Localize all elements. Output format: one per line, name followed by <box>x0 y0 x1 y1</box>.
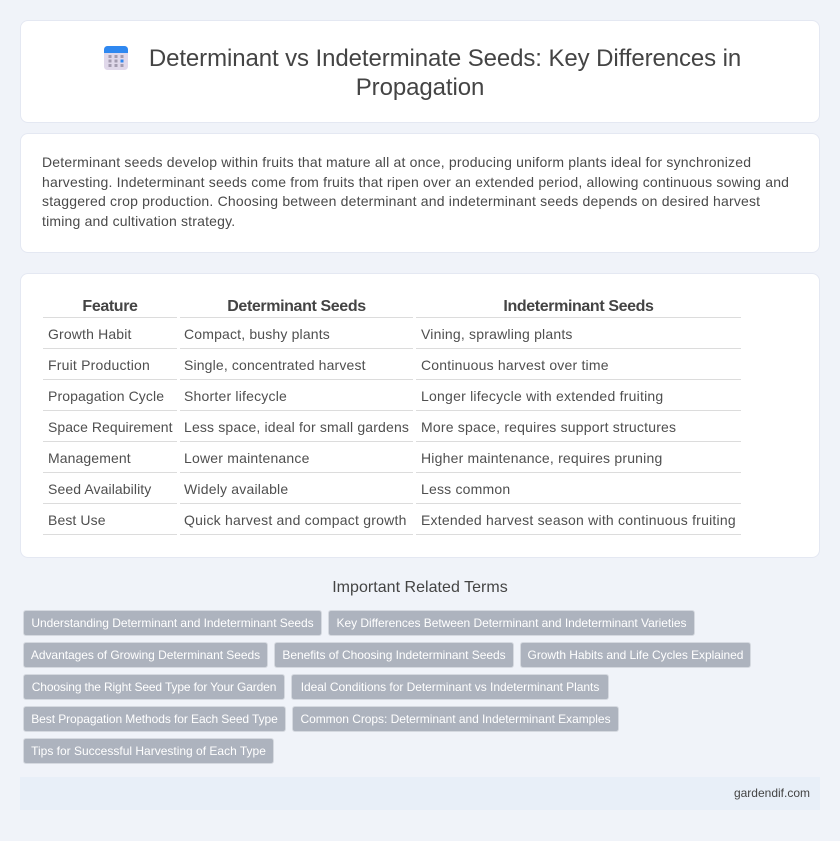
tag <box>291 674 609 700</box>
table: determinant vs indeterminant: Best Use <box>48 512 106 528</box>
table: determinant vs indeterminant: Longer lifecycle with extended fruiting <box>421 388 663 404</box>
tag: Key Differences Between Determinant and Indeterminant Varieties <box>337 616 686 630</box>
heading: related terms: Important Related Terms <box>332 579 508 596</box>
tag: Growth Habits and Life Cycles Explained <box>528 648 743 662</box>
panel: header <box>20 20 820 123</box>
table: determinant vs indeterminant: Continuous harvest over time <box>421 357 609 373</box>
table: determinant vs indeterminant: More space, requires support structures <box>421 419 676 435</box>
table: determinant vs indeterminant: Higher maintenance, requires pruning <box>421 450 662 466</box>
tag <box>520 642 751 668</box>
table: determinant vs indeterminant: Management <box>48 450 131 466</box>
text block: introduction <box>42 154 789 229</box>
panel: introduction <box>20 133 820 253</box>
text block: introduction: harvesting. Indeterminant seeds come from fruits that ripen over an extended period, allowing continuous sowing and <box>42 174 789 190</box>
tag <box>23 738 274 764</box>
tag <box>23 674 285 700</box>
table: determinant vs indeterminant: Shorter lifecycle <box>184 388 287 404</box>
tag: Benefits of Choosing Indeterminant Seeds <box>282 648 506 662</box>
text block: introduction: Determinant seeds develop within fruits that mature all at once, producing uniform plants ideal for synchronized <box>42 154 751 170</box>
tag: Common Crops: Determinant and Indeterminant Examples <box>300 712 611 726</box>
table: determinant vs indeterminant: Seed Availability <box>48 481 151 497</box>
tag <box>274 642 514 668</box>
tag <box>23 610 322 636</box>
tags: related terms <box>23 610 751 764</box>
tag: Choosing the Right Seed Type for Your Garden <box>32 680 276 694</box>
icon: calendar <box>104 46 128 70</box>
table: determinant vs indeterminant: Widely available <box>184 481 288 497</box>
table: determinant vs indeterminant: Vining, sprawling plants <box>421 326 573 342</box>
tag <box>292 706 619 732</box>
title: Propagation <box>356 74 484 101</box>
title: Determinant vs Indeterminate Seeds: Key Differences in <box>149 45 741 72</box>
table: determinant vs indeterminant: Single, concentrated harvest <box>184 357 366 373</box>
tag: Best Propagation Methods for Each Seed Type <box>31 712 278 726</box>
tag: Understanding Determinant and Indeterminant Seeds <box>31 616 314 630</box>
title <box>149 45 741 101</box>
footer: site name: gardendif.com <box>734 786 810 800</box>
table: determinant vs indeterminant: Lower maintenance <box>184 450 310 466</box>
table: determinant vs indeterminant: Fruit Production <box>48 357 150 373</box>
text block: introduction: staggered crop production. Choosing between determinant and indeterminant seeds depends on desired harvest <box>42 193 760 209</box>
table: determinant vs indeterminant: Less common <box>421 481 510 497</box>
text block: introduction: timing and cultivation strategy. <box>42 213 235 229</box>
table: determinant vs indeterminant: Determinant Seeds <box>227 298 366 315</box>
tag: Ideal Conditions for Determinant vs Indeterminant Plants <box>301 680 599 694</box>
tag: Tips for Successful Harvesting of Each Type <box>31 744 266 758</box>
table: determinant vs indeterminant: Less space, ideal for small gardens <box>184 419 409 435</box>
tag: Advantages of Growing Determinant Seeds <box>31 648 260 662</box>
table: determinant vs indeterminant: Indeterminant Seeds <box>503 298 654 315</box>
table: determinant vs indeterminant: Propagation Cycle <box>48 388 164 404</box>
table: determinant vs indeterminant <box>43 298 741 535</box>
table: determinant vs indeterminant: Extended harvest season with continuous fruiting <box>421 512 736 528</box>
panel: comparison table <box>20 273 820 558</box>
table: determinant vs indeterminant: Quick harvest and compact growth <box>184 512 407 528</box>
header: Feature: Feature <box>82 298 138 315</box>
footer <box>20 777 820 810</box>
table: determinant vs indeterminant: Growth Habit <box>48 326 132 342</box>
tag <box>23 642 268 668</box>
table: determinant vs indeterminant: Compact, bushy plants <box>184 326 330 342</box>
tag <box>23 706 286 732</box>
table: determinant vs indeterminant: Space Requirement <box>48 419 173 435</box>
tag <box>328 610 695 636</box>
